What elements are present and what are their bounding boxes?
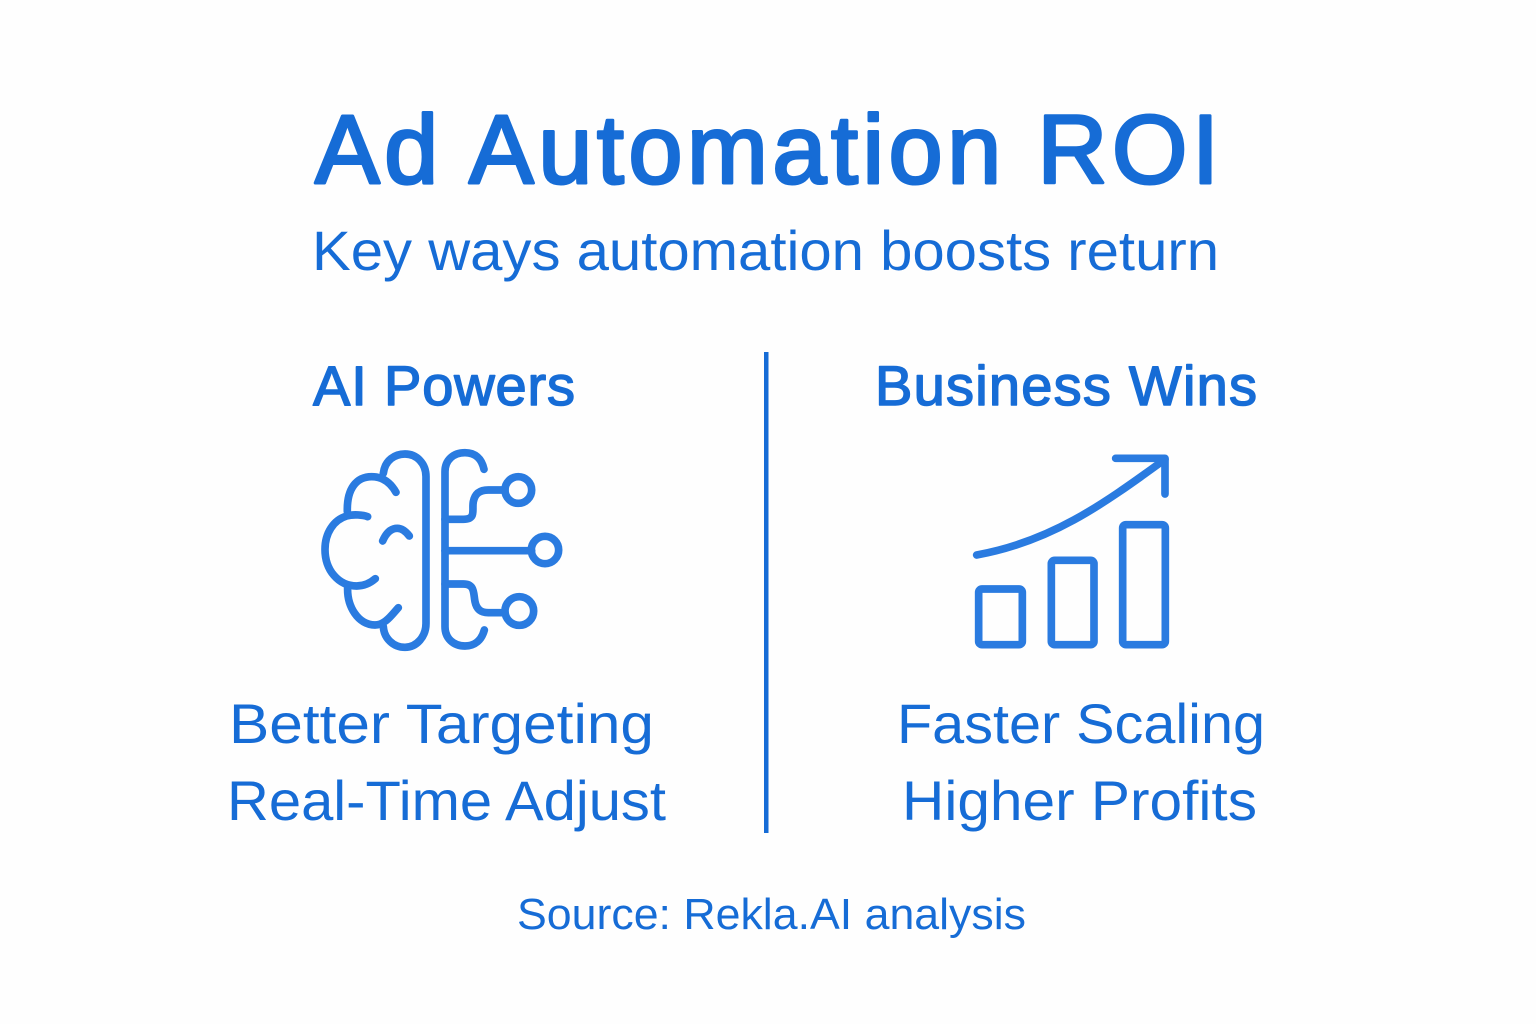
heading: AI Powers: AI Powers — [313, 354, 575, 417]
icon: brain with circuit nodes — [325, 453, 559, 647]
divider — [764, 352, 768, 833]
heading: Business Wins: Business Wins — [875, 354, 1257, 417]
icon: rising bar chart with arrow — [977, 458, 1165, 645]
panel: AI Powers — [227, 354, 666, 832]
list item: Real-Time Adjust: Real-Time Adjust — [227, 769, 666, 832]
title: Ad Automation ROI — [315, 95, 1219, 204]
list item: Higher Profits: Higher Profits — [902, 769, 1257, 832]
source note: Source: Rekla.AI analysis — [517, 890, 1026, 939]
list item: Faster Scaling: Faster Scaling — [897, 692, 1265, 755]
subtitle: Key ways automation boosts return — [312, 219, 1219, 282]
list item: Better Targeting: Better Targeting — [229, 692, 654, 755]
panel: Business Wins — [875, 354, 1265, 832]
